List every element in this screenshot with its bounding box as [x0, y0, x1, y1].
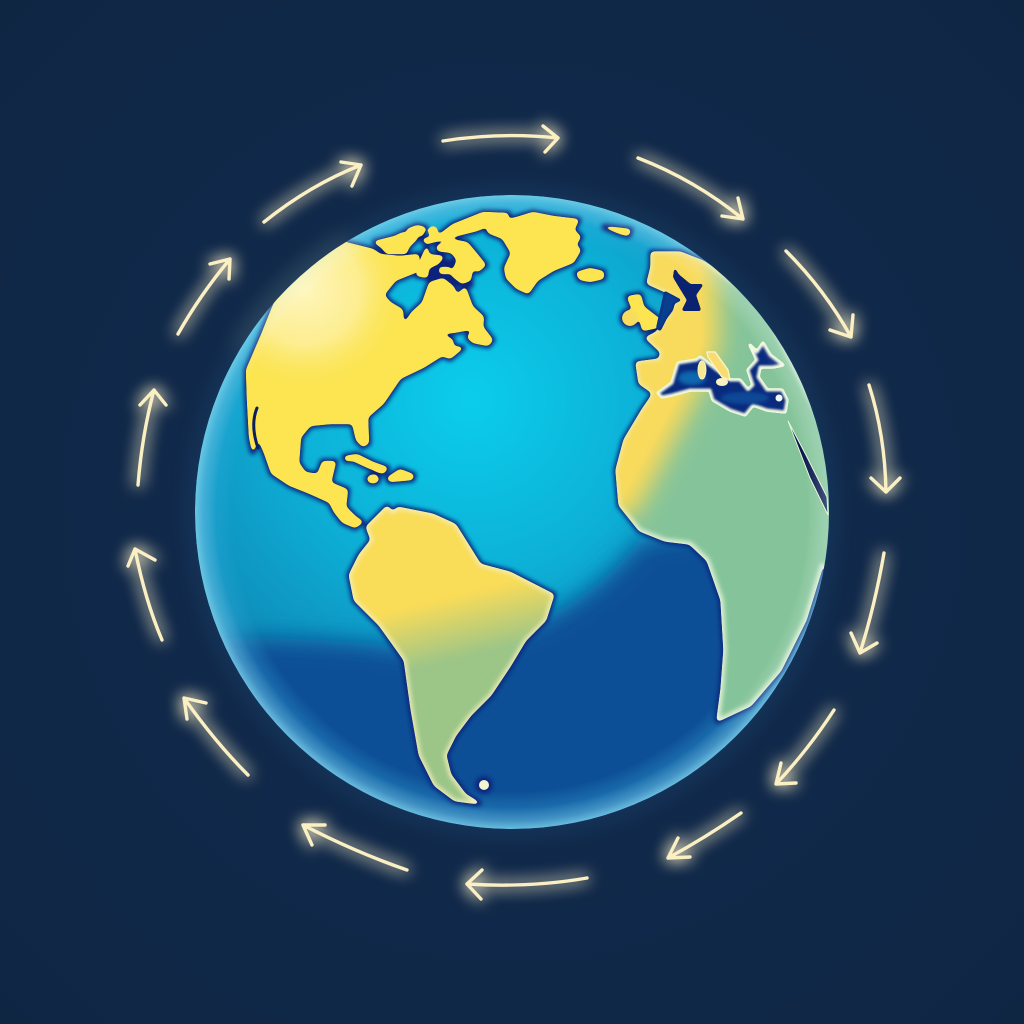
land rim light: [195, 195, 829, 829]
arrow 1: [443, 126, 558, 152]
globe glow: [190, 190, 834, 834]
continent: Europe and Africa: [616, 251, 829, 721]
arrow 12: [138, 390, 166, 485]
Mediterranean Sea: [658, 343, 787, 415]
arrow 3: [786, 251, 853, 337]
orbit arrows: [128, 126, 900, 899]
arrow 2: [638, 158, 743, 219]
arrow 4: [869, 385, 900, 492]
arrow 11: [128, 549, 162, 640]
continent: South America: [350, 507, 553, 803]
continent: North America: [246, 242, 492, 528]
arrow 14: [264, 162, 361, 222]
Baltic Sea: [657, 270, 702, 330]
arrow 5: [851, 553, 884, 653]
arrow 7: [668, 813, 741, 858]
arrow 8: [467, 870, 587, 899]
ocean: [195, 195, 829, 829]
arctic islands, Greenland and Caribbean: [345, 213, 660, 482]
arrow 9: [303, 825, 407, 870]
Red Sea: [788, 421, 828, 515]
arrow 10: [184, 698, 248, 775]
arrow 6: [776, 710, 834, 784]
globe: [195, 195, 829, 829]
coast shadows: [247, 213, 850, 803]
arrow 13: [178, 259, 230, 334]
